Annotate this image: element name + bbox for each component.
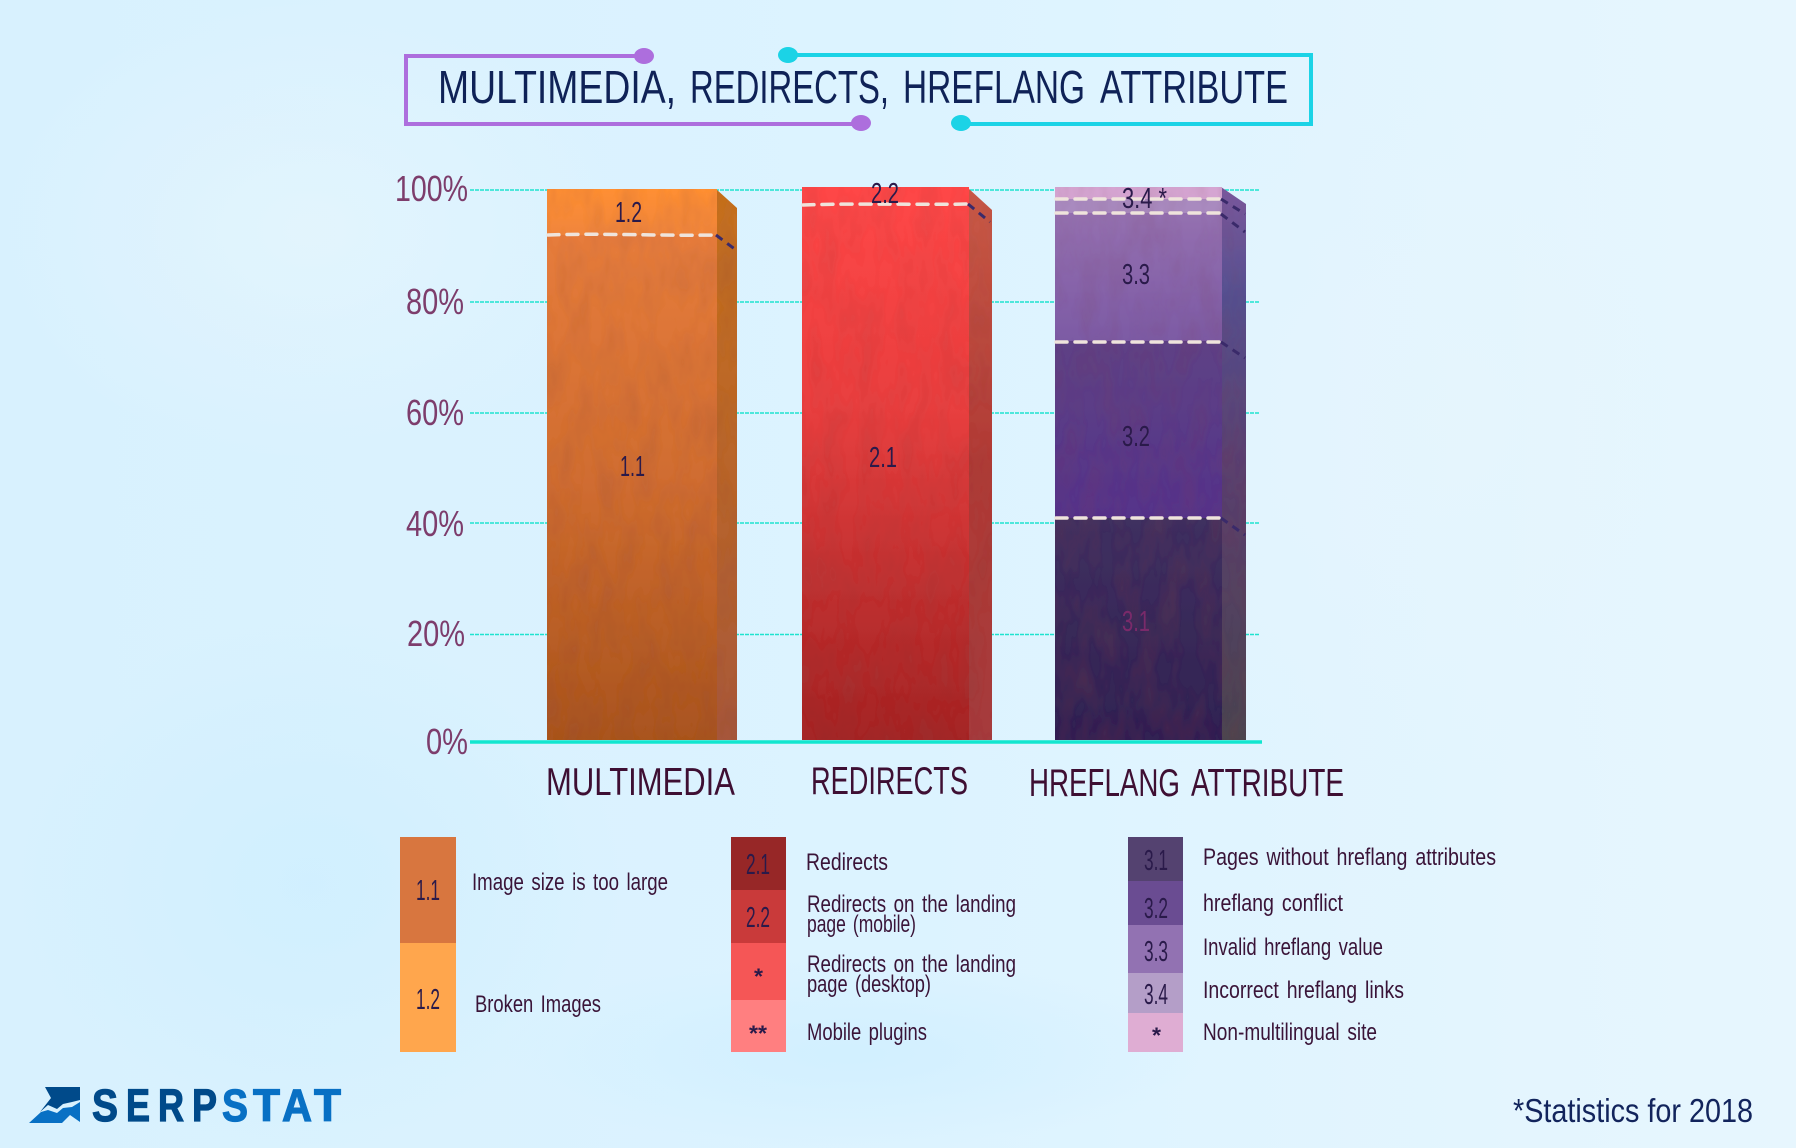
legend: hreflang: Invalid hreflang value xyxy=(1203,934,1383,961)
legend: redirects: * xyxy=(754,964,763,989)
logo: serpstat xyxy=(29,1080,341,1131)
bar: redirects: 2.2 xyxy=(871,178,899,210)
legend: redirects: Redirects on the landing xyxy=(807,891,1016,918)
legend: hreflang: * xyxy=(1152,1023,1161,1048)
bar: redirects: 2.1 xyxy=(869,442,897,474)
y axis labels xyxy=(395,168,468,762)
bar: multimedia: 1.2 xyxy=(615,197,642,229)
bar: hreflang attribute: 3.1 xyxy=(1122,606,1150,638)
legend: redirects: ** xyxy=(749,1021,767,1046)
legend: multimedia: Broken Images xyxy=(475,991,601,1018)
bar: redirects xyxy=(802,178,992,740)
cyan bracket xyxy=(778,47,1311,131)
purple bracket xyxy=(406,48,871,131)
wordmark: T xyxy=(314,1080,341,1131)
y axis labels: 100% xyxy=(395,168,468,209)
bar: hreflang attribute: 3.4 * xyxy=(1122,183,1167,215)
legend: hreflang: Incorrect hreflang links xyxy=(1203,977,1404,1004)
legend: redirects: Redirects xyxy=(806,849,888,876)
legend: redirects: Mobile plugins xyxy=(807,1019,927,1046)
x axis baseline xyxy=(470,740,1262,744)
legend: redirects: 2.1 xyxy=(746,849,770,881)
y axis labels: 20% xyxy=(407,613,465,654)
legend: multimedia: 1.2 xyxy=(416,984,440,1016)
bar: hreflang attribute: 3.3 xyxy=(1122,259,1150,291)
wordmark: P xyxy=(192,1080,217,1131)
legend: hreflang xyxy=(1128,837,1496,1052)
title xyxy=(438,61,1288,113)
bar: hreflang attribute: 3.2 xyxy=(1122,421,1150,453)
y axis labels: 0% xyxy=(426,721,468,762)
title box xyxy=(406,47,1311,131)
legend: redirects: 2.2 xyxy=(746,902,770,934)
category labels: HREFLANG xyxy=(1029,762,1180,805)
legend: hreflang: 3.4 xyxy=(1144,979,1168,1011)
legend: hreflang: hreflang conflict xyxy=(1203,890,1343,917)
legend: hreflang: 3.2 xyxy=(1144,893,1168,925)
title: HREFLANG xyxy=(903,61,1085,113)
category labels: MULTIMEDIA xyxy=(546,761,735,804)
wordmark: A xyxy=(282,1080,312,1131)
wordmark xyxy=(92,1080,341,1131)
footnote: *Statistics for 2018 xyxy=(1513,1092,1753,1129)
wordmark: E xyxy=(126,1080,150,1131)
category labels xyxy=(546,760,1344,805)
wordmark: S xyxy=(222,1080,248,1131)
legend: multimedia: Image size is too large xyxy=(472,869,668,896)
legend: redirects: page (desktop) xyxy=(807,971,931,998)
wordmark: R xyxy=(158,1080,184,1131)
legend: redirects xyxy=(731,837,1016,1052)
bar: multimedia: 1.1 xyxy=(620,451,645,483)
y axis grid lines xyxy=(470,190,1260,634)
icon: chart arrow xyxy=(29,1087,80,1123)
legend: hreflang: Non-multilingual site xyxy=(1203,1019,1377,1046)
legend: hreflang: Pages without hreflang attributes xyxy=(1203,844,1496,871)
y axis labels: 40% xyxy=(406,503,464,544)
legend: hreflang: 3.1 xyxy=(1144,845,1168,877)
bar: hreflang attribute xyxy=(1055,183,1246,740)
legend: redirects: Redirects on the landing xyxy=(807,951,1016,978)
bar: multimedia xyxy=(547,189,737,740)
legend: hreflang: 3.3 xyxy=(1144,936,1168,968)
category labels: REDIRECTS xyxy=(811,760,968,803)
legend: multimedia xyxy=(400,837,668,1052)
y axis labels: 80% xyxy=(406,281,464,322)
wordmark: S xyxy=(92,1080,118,1131)
category labels: ATTRIBUTE xyxy=(1191,762,1344,805)
legend: multimedia: 1.1 xyxy=(416,875,440,907)
title: MULTIMEDIA, xyxy=(438,61,676,113)
title: ATTRIBUTE xyxy=(1100,61,1288,113)
legend: redirects: page (mobile) xyxy=(807,911,916,938)
wordmark: T xyxy=(253,1080,280,1131)
title: REDIRECTS, xyxy=(690,61,889,113)
y axis labels: 60% xyxy=(406,392,464,433)
